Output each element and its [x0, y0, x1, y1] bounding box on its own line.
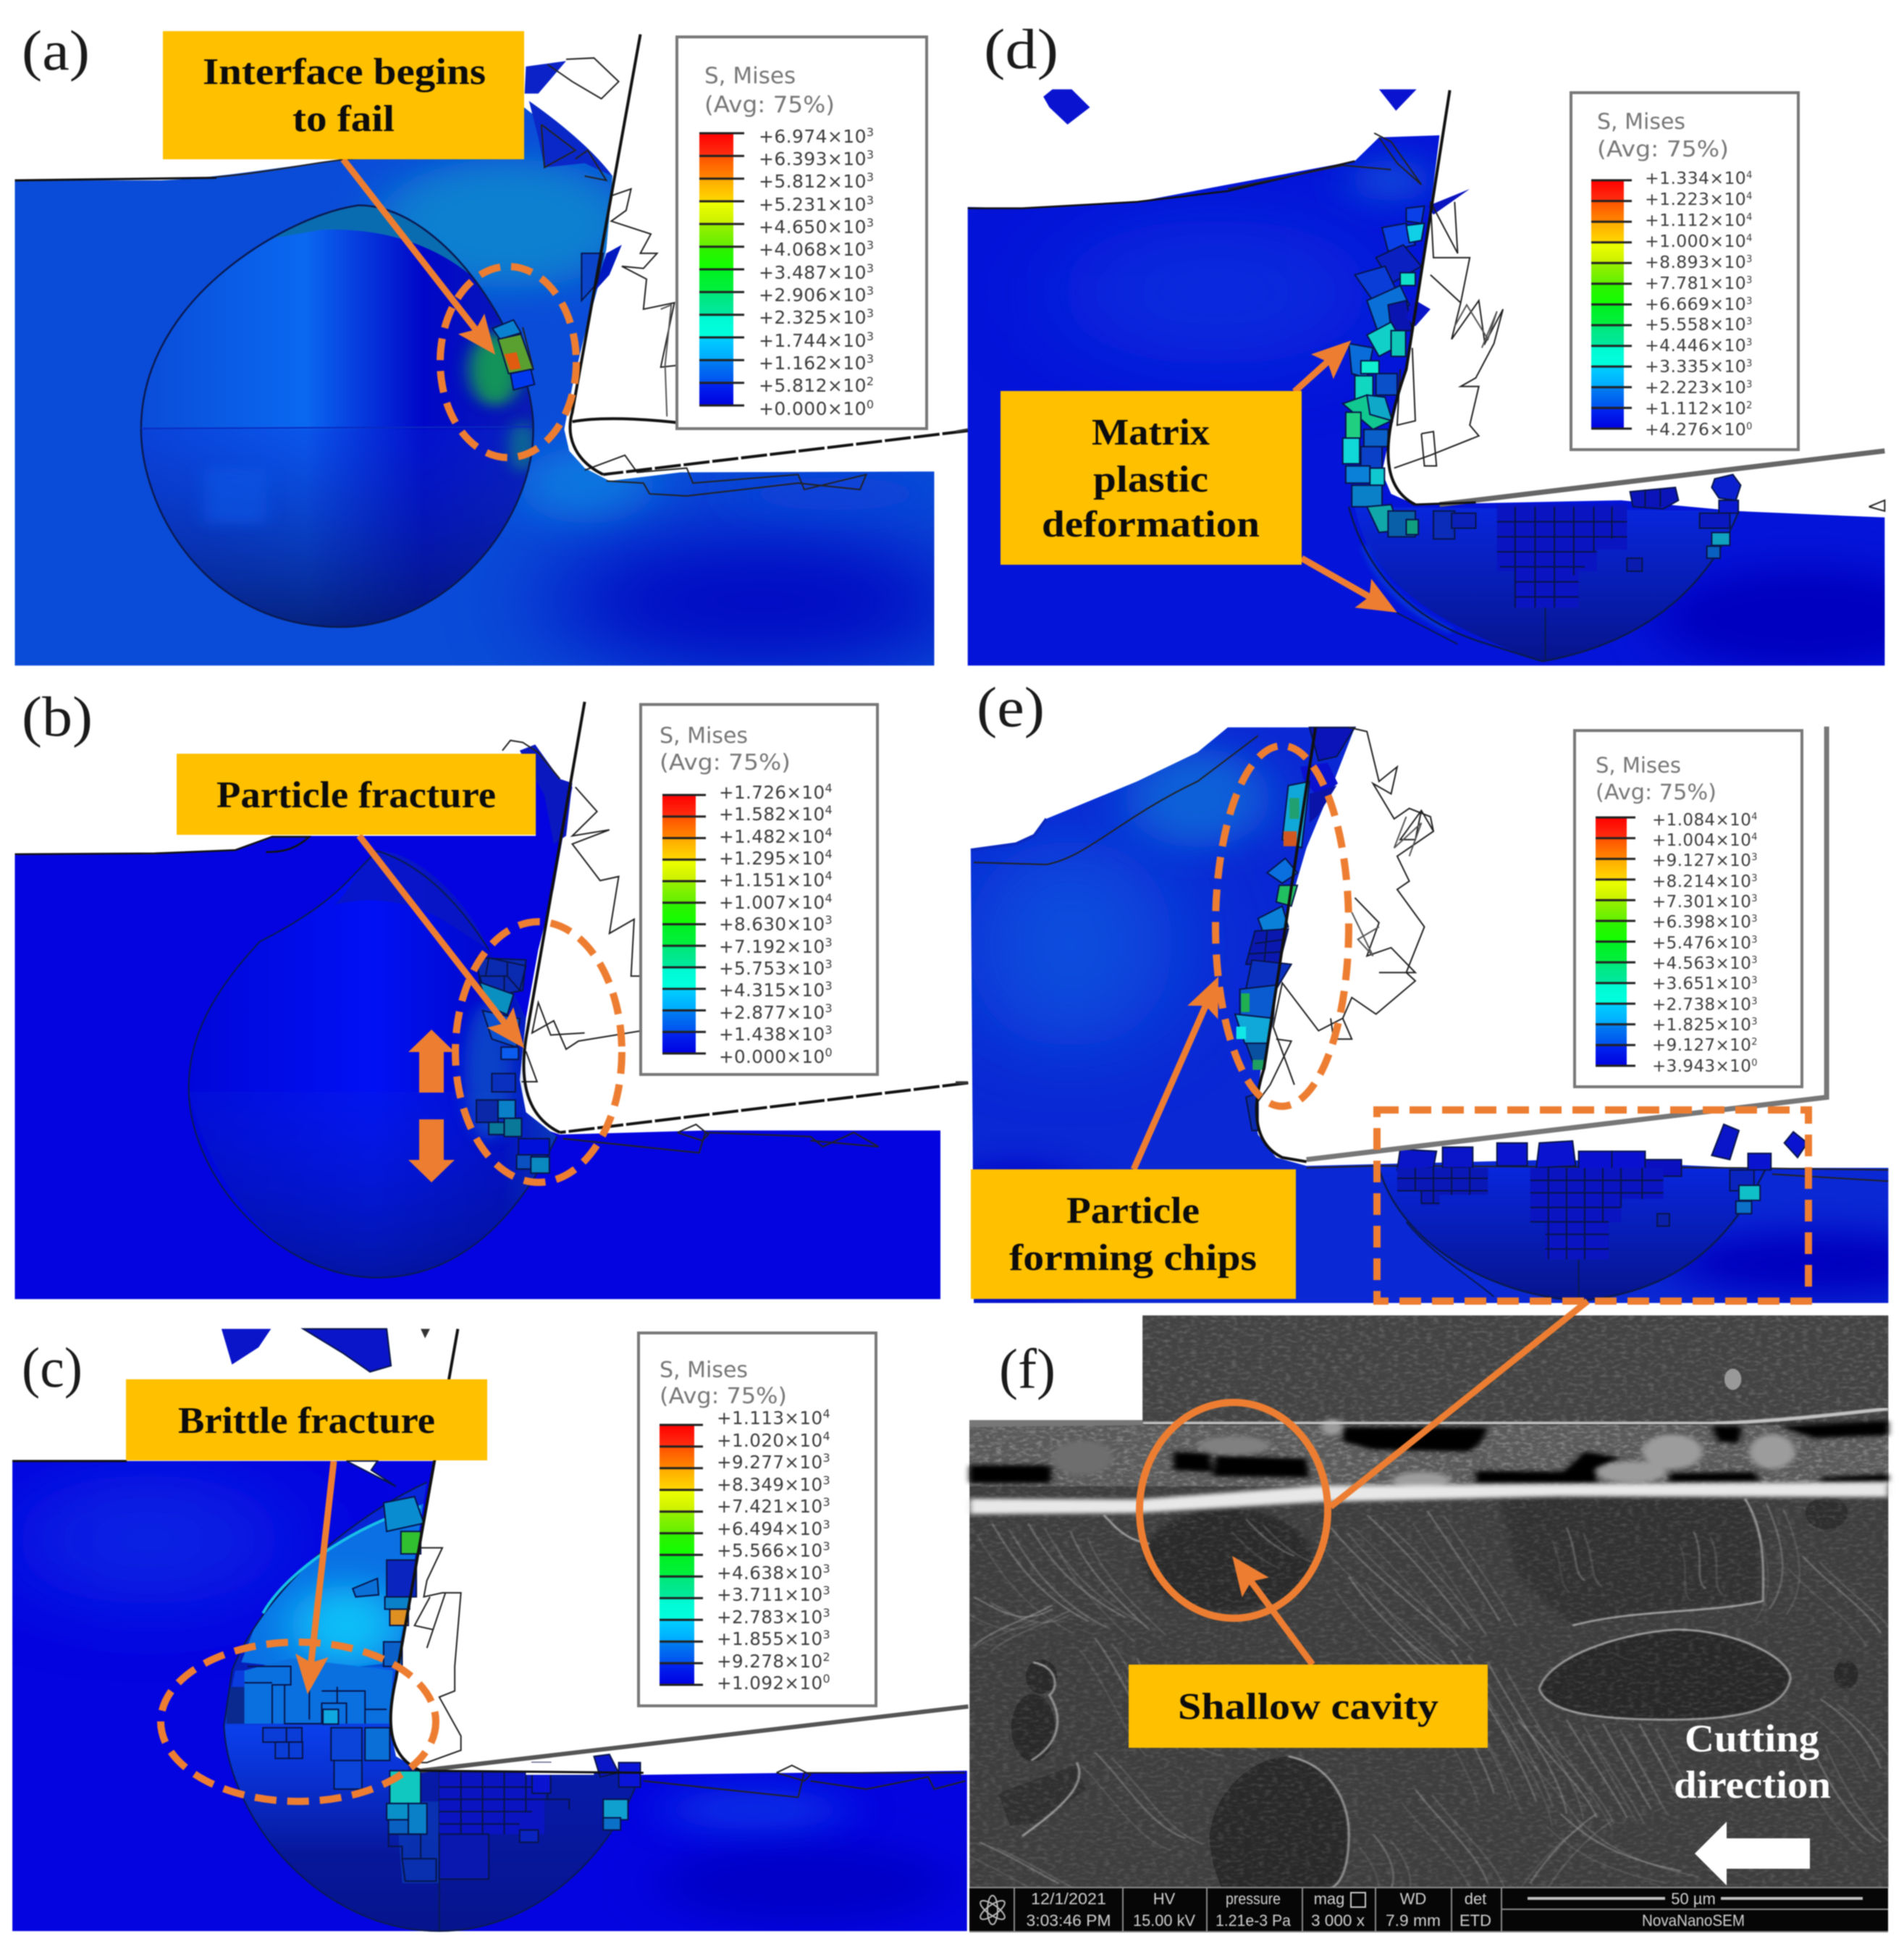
legend d: 4 [1746, 233, 1753, 244]
legend c: 3 [823, 1473, 830, 1487]
legend b: 3 [825, 1001, 833, 1015]
legend a: 3 [867, 284, 874, 298]
annotation e: arrow [1134, 983, 1216, 1169]
annotation e: dashed ellipse [1216, 746, 1349, 1106]
legend e: +4.563×10 [1652, 954, 1751, 973]
legend e: +2.738×10 [1652, 996, 1751, 1014]
legend c: S, Mises [660, 1358, 748, 1383]
legend c: 3 [823, 1583, 830, 1597]
callout d: matrix plastic deformation [1001, 391, 1302, 565]
callout a: interface begins to fail [163, 31, 524, 159]
legend d: +7.781×10 [1645, 273, 1746, 293]
cavity rims [1022, 1499, 1790, 1888]
callout e: particle forming chips [971, 1169, 1296, 1299]
legend a: 3 [867, 148, 874, 161]
legend b: +8.630×10 [719, 914, 825, 935]
legend d: 3 [1746, 296, 1753, 307]
legend e: 3 [1751, 935, 1758, 946]
SEM info bar: 15.00 kV [1133, 1911, 1195, 1930]
legend a: +1.744×10 [759, 330, 867, 351]
annotation c: dashed ellipse [161, 1642, 436, 1801]
legend b: S, Mises [660, 723, 748, 749]
legend a: +5.812×10 [759, 171, 867, 192]
arrow: cutting direction [1695, 1822, 1810, 1885]
legend e [1575, 731, 1802, 1087]
circle: shallow cavity highlight [1140, 1402, 1328, 1618]
legend c: 2 [823, 1650, 830, 1664]
legend d: 0 [1746, 421, 1753, 432]
SEM info bar: pressure [1226, 1890, 1281, 1908]
SEM info bar: 50 µm [1671, 1890, 1716, 1908]
legend d: +1.112×10 [1645, 210, 1746, 230]
simulation field c [12, 1329, 968, 1931]
legend c: +6.494×10 [717, 1518, 823, 1539]
legend e: +1.084×10 [1652, 811, 1751, 830]
legend c: 4 [823, 1407, 830, 1421]
legend d: 3 [1746, 379, 1753, 390]
legend b: +2.877×10 [719, 1002, 825, 1023]
flying pieces d [1043, 89, 1470, 215]
legend b: +4.315×10 [719, 980, 825, 1001]
fractured elements b [476, 958, 549, 1173]
legend e: 4 [1751, 812, 1758, 823]
legend e: +3.651×10 [1652, 975, 1751, 993]
legend c: (Avg: 75%) [660, 1384, 787, 1409]
legend a: +0.000×10 [759, 398, 867, 419]
bright edge band [969, 1482, 1888, 1514]
annotation c: arrow [308, 1461, 334, 1687]
legend d: 3 [1746, 316, 1753, 327]
SEM info bar: 3 000 x [1311, 1911, 1365, 1930]
cutting tool outline b [523, 702, 585, 1132]
callout d: matrix plastic deformation: Matrix [1092, 412, 1210, 453]
icon: atom logo [978, 1896, 1007, 1924]
legend e: 0 [1751, 1058, 1758, 1069]
legend d: +1.112×10 [1645, 398, 1746, 418]
callout b: particle fracture: Particle fracture [216, 775, 496, 816]
cutting tool outline c [391, 1329, 458, 1771]
fractured elements c [245, 1461, 641, 1881]
legend c: +2.783×10 [717, 1607, 823, 1628]
legend b: +1.726×10 [719, 782, 825, 803]
legend b: 4 [825, 869, 833, 883]
panel a: interface failure simulation [15, 34, 972, 674]
cutting tool outline a [570, 34, 641, 474]
legend d: +4.276×10 [1645, 419, 1746, 439]
legend a: 3 [867, 193, 874, 207]
gap with debris [969, 1419, 1888, 1489]
annotation b: arrow [359, 836, 520, 1043]
SEM info bar: ETD [1459, 1911, 1491, 1930]
legend a: 3 [867, 125, 874, 139]
SEM info bar: HV [1153, 1890, 1176, 1908]
legend b: +7.192×10 [719, 936, 825, 957]
legend e: 3 [1751, 1017, 1758, 1027]
failed elements [492, 320, 534, 390]
callout a: interface begins to fail: to fail [292, 98, 395, 140]
legend d: 3 [1746, 358, 1753, 369]
legend d: +4.446×10 [1645, 335, 1746, 356]
legend e: 3 [1751, 996, 1758, 1007]
deformed elements d [1343, 206, 1740, 607]
legend b: (Avg: 75%) [660, 750, 791, 775]
callout f: shallow cavity: Shallow cavity [1178, 1686, 1438, 1728]
panel d: matrix plastic deformation simulation [956, 89, 1904, 670]
legend a: +2.325×10 [759, 307, 867, 328]
annotation a: arrow [343, 159, 491, 349]
legend a: +2.906×10 [759, 285, 867, 306]
simulation field b [15, 702, 968, 1299]
chip fragments b [502, 741, 879, 1153]
legend c: 3 [823, 1606, 830, 1620]
legend b: +1.582×10 [719, 804, 825, 825]
callout e: particle forming chips: Particle [1066, 1190, 1200, 1232]
legend c: +8.349×10 [717, 1474, 823, 1495]
legend c: 3 [823, 1628, 830, 1641]
annotation b: dashed ellipse [455, 922, 622, 1182]
SEM image [959, 1316, 1898, 1901]
legend b: +0.000×10 [719, 1046, 825, 1067]
legend b: 3 [825, 913, 833, 927]
SEM info bar [969, 1888, 1888, 1932]
legend c: 3 [823, 1539, 830, 1553]
legend a: +3.487×10 [759, 262, 867, 283]
legend a: 3 [867, 238, 874, 252]
legend c: 4 [823, 1429, 830, 1443]
chip fragments c [411, 1548, 965, 1797]
cutting tool outline d [1388, 91, 1450, 505]
callout a: interface begins to fail: Interface begins [203, 51, 486, 93]
chip fragments a [525, 58, 866, 496]
legend e: 3 [1751, 893, 1758, 904]
legend d: +2.223×10 [1645, 377, 1746, 397]
legend d: +5.558×10 [1645, 314, 1746, 335]
dark cavities [998, 1497, 1858, 1888]
panel labels [22, 17, 1058, 1400]
callout c: brittle fracture [126, 1379, 487, 1460]
simulation field a [15, 34, 972, 674]
arrow: shallow cavity pointer [1237, 1562, 1313, 1665]
legend c: +7.421×10 [717, 1496, 823, 1517]
legend e: S, Mises [1596, 753, 1681, 778]
callout f: shallow cavity [1129, 1665, 1488, 1748]
legend b: +5.753×10 [719, 958, 825, 979]
legend b: +1.151×10 [719, 870, 825, 891]
legend b: 4 [825, 847, 833, 861]
legend c [639, 1333, 876, 1706]
panel labels: (e) [977, 676, 1045, 739]
legend b: 4 [825, 825, 833, 839]
legend b [641, 704, 877, 1074]
legend b: 4 [825, 781, 833, 795]
legend e: +1.004×10 [1652, 831, 1751, 850]
legend a: 2 [867, 374, 874, 388]
legend e: +9.127×10 [1652, 851, 1751, 870]
SEM info bar: det [1465, 1890, 1486, 1908]
legend d: +3.335×10 [1645, 356, 1746, 376]
legend b: +1.007×10 [719, 892, 825, 913]
legend c: +4.638×10 [717, 1562, 823, 1583]
legend e: +1.825×10 [1652, 1016, 1751, 1035]
annotation e: dashed rectangle [1377, 1110, 1808, 1301]
annotation b: opposing stress arrows [408, 1030, 455, 1182]
legend b: 4 [825, 803, 833, 817]
connector: panel e to panel f [1331, 1301, 1588, 1507]
legend d: 2 [1746, 400, 1753, 411]
legend a: 3 [867, 170, 874, 184]
panel labels: (d) [984, 17, 1058, 80]
lamellae [959, 1503, 1898, 1901]
callout d: matrix plastic deformation: deformation [1042, 504, 1260, 545]
simulation field e [919, 726, 1904, 1305]
legend a: 3 [867, 329, 874, 343]
legend b: 3 [825, 957, 833, 971]
cutting direction label: direction [1674, 1763, 1831, 1806]
SEM info bar: WD [1400, 1890, 1426, 1908]
legend e: +9.127×10 [1652, 1036, 1751, 1055]
legend d: +1.000×10 [1645, 231, 1746, 251]
legend c: 3 [823, 1495, 830, 1509]
legend d: 4 [1746, 170, 1753, 181]
callout e: particle forming chips: forming chips [1009, 1237, 1257, 1279]
legend e: +3.943×10 [1652, 1057, 1751, 1076]
legend c: 3 [823, 1451, 830, 1465]
legend d: (Avg: 75%) [1597, 137, 1729, 162]
cutting tool outline e [1307, 726, 1827, 1160]
legend a: +6.393×10 [759, 148, 867, 169]
legend e: 2 [1751, 1037, 1758, 1048]
legend a: +1.162×10 [759, 353, 867, 374]
legend b: +1.438×10 [719, 1024, 825, 1045]
legend b: 3 [825, 979, 833, 993]
legend c: 3 [823, 1518, 830, 1531]
legend d: 3 [1746, 337, 1753, 348]
legend b: 4 [825, 891, 833, 905]
SEM info bar: NovaNanoSEM [1642, 1911, 1745, 1930]
legend d: S, Mises [1597, 109, 1685, 135]
panel e: particle forming chips simulation [919, 726, 1904, 1305]
legend c: +1.020×10 [717, 1430, 823, 1451]
legend a: +5.231×10 [759, 194, 867, 215]
legend a: 3 [867, 352, 874, 366]
legend a: +4.068×10 [759, 239, 867, 260]
legend c: +5.566×10 [717, 1540, 823, 1561]
legend c: +9.278×10 [717, 1651, 823, 1672]
legend c: +1.855×10 [717, 1628, 823, 1649]
callout c: brittle fracture: Brittle fracture [178, 1400, 435, 1442]
legend b: 3 [825, 1023, 833, 1037]
panel labels: (c) [22, 1336, 83, 1399]
legend d: +1.334×10 [1645, 168, 1746, 188]
legend e: 3 [1751, 975, 1758, 986]
callout b: particle fracture [177, 754, 536, 835]
legend a: +6.974×10 [759, 126, 867, 147]
legend a: +4.650×10 [759, 216, 867, 237]
legend e: 3 [1751, 873, 1758, 884]
legend e: +5.476×10 [1652, 934, 1751, 953]
panel labels: (a) [22, 19, 90, 82]
panel c: brittle fracture simulation [12, 1329, 968, 1931]
SEM info bar: mag [1314, 1890, 1344, 1908]
SEM info bar: 7.9 mm [1386, 1911, 1441, 1930]
panel b: particle fracture simulation [15, 702, 968, 1299]
fragmented elements e [1235, 728, 1807, 1259]
cutting direction label [1674, 1717, 1831, 1806]
chip fragments e [956, 728, 1433, 1101]
legend c: +1.092×10 [717, 1673, 823, 1694]
flying chips c [222, 1329, 430, 1372]
legend e: +7.301×10 [1652, 893, 1751, 912]
annotation d: arrows [1294, 345, 1391, 609]
legend d: +1.223×10 [1645, 189, 1746, 209]
legend d: 3 [1746, 254, 1753, 265]
legend d: 4 [1746, 191, 1753, 202]
SEM info bar: 12/1/2021 [1031, 1890, 1106, 1908]
legend a: 0 [867, 397, 874, 411]
legend e: +8.214×10 [1652, 872, 1751, 891]
panel f: SEM micrograph [959, 1316, 1898, 1932]
legend a: (Avg: 75%) [704, 92, 835, 118]
legend a [677, 37, 927, 429]
panel labels: (b) [22, 685, 93, 748]
legend d: 4 [1746, 212, 1753, 223]
legend d [1571, 93, 1798, 450]
legend b: +1.482×10 [719, 826, 825, 847]
legend e: +6.398×10 [1652, 913, 1751, 932]
legend b: 0 [825, 1046, 833, 1059]
legend a: S, Mises [704, 63, 796, 89]
legend c: +3.711×10 [717, 1584, 823, 1605]
legend e: 4 [1751, 832, 1758, 843]
callout d: matrix plastic deformation: plastic [1093, 459, 1208, 500]
chip fragments d [956, 133, 1884, 511]
legend b: +1.295×10 [719, 848, 825, 869]
legend c: +9.277×10 [717, 1452, 823, 1473]
legend a: +5.812×10 [759, 375, 867, 396]
legend a: 3 [867, 306, 874, 320]
simulation field d [956, 89, 1904, 670]
legend d: +6.669×10 [1645, 294, 1746, 314]
legend e: 3 [1751, 852, 1758, 863]
panel labels: (f) [999, 1337, 1056, 1400]
legend c: 3 [823, 1562, 830, 1576]
legend c: 0 [823, 1672, 830, 1686]
annotation a: dashed ellipse [440, 266, 576, 458]
legend c: +1.113×10 [717, 1408, 823, 1429]
SEM info bar: 3:03:46 PM [1027, 1911, 1111, 1930]
legend e: 3 [1751, 914, 1758, 925]
legend a: 3 [867, 216, 874, 230]
legend e: (Avg: 75%) [1596, 780, 1716, 804]
legend e: 3 [1751, 955, 1758, 966]
legend b: 3 [825, 935, 833, 949]
legend a: 3 [867, 261, 874, 275]
cutting direction label: Cutting [1685, 1717, 1819, 1760]
legend d: +8.893×10 [1645, 252, 1746, 272]
legend d: 3 [1746, 275, 1753, 286]
SEM info bar: 1.21e-3 Pa [1216, 1911, 1292, 1930]
